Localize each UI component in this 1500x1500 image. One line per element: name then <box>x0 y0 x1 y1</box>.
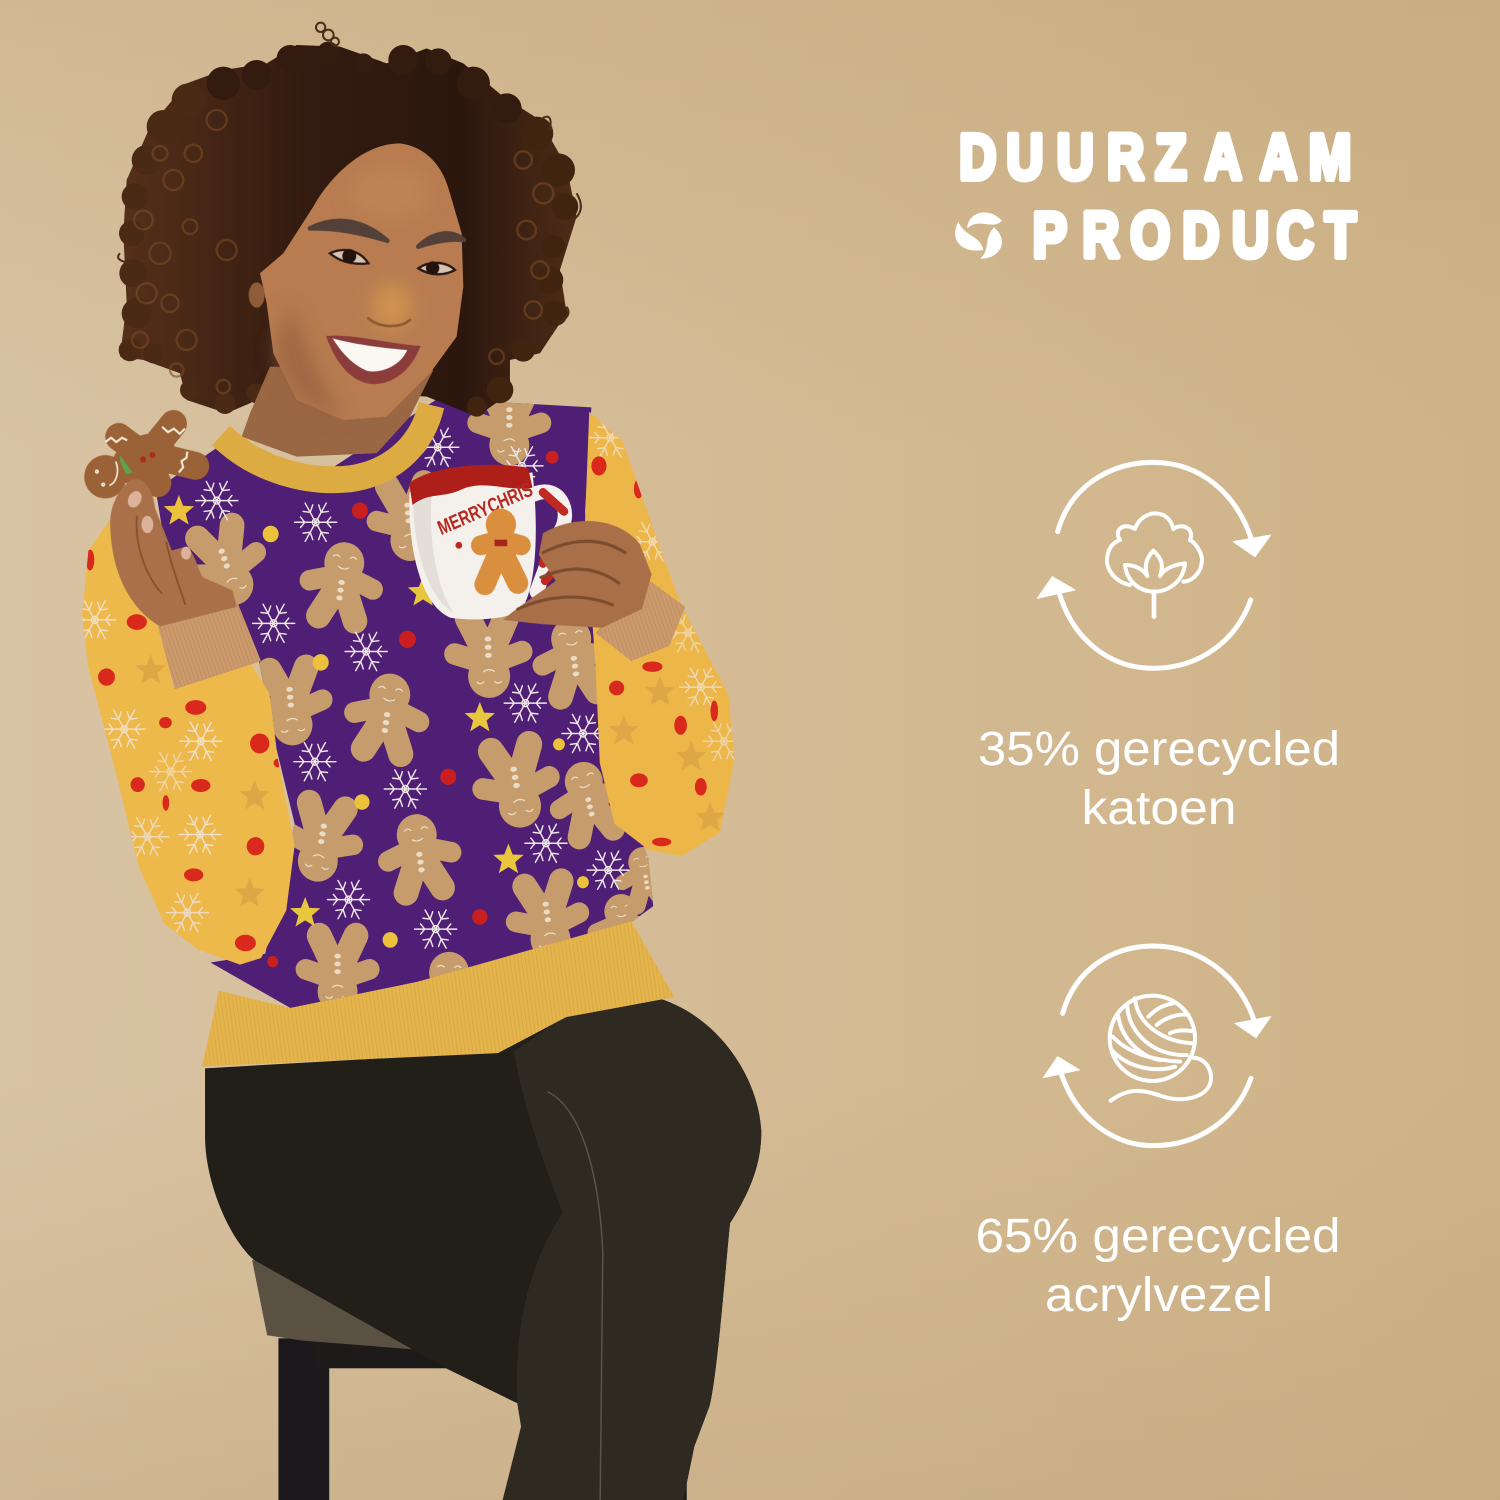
stray curl <box>118 23 581 323</box>
mug <box>409 465 536 619</box>
gingerbread cookie <box>84 423 196 498</box>
candy cane handle <box>535 492 565 592</box>
left hand holding cookie <box>110 479 237 626</box>
dots and stars on torso <box>164 451 589 967</box>
left sleeve <box>82 520 295 965</box>
right sleeve <box>585 412 734 856</box>
hands, mug and cookie <box>84 423 652 628</box>
text: 65% gerecycled acrylvezel: 65% gerecycled <box>976 1210 1340 1263</box>
text: 35% gerecycled katoen <box>978 723 1340 835</box>
heading line 2: PRODUCT <box>1033 201 1356 271</box>
photo: seated woman in Christmas sweater <box>74 23 761 1500</box>
text: 65% gerecycled acrylvezel: acrylvezel <box>1045 1269 1273 1322</box>
icon: yarn ball with recycle arrows <box>1043 946 1271 1146</box>
collar <box>221 405 431 480</box>
title: Duurzaam product <box>955 123 1356 271</box>
smile <box>326 336 421 384</box>
sleeve cuffs <box>158 576 685 689</box>
purple torso <box>156 399 653 1008</box>
gingerbread men pattern <box>185 389 673 1030</box>
text: 35% gerecycled katoen: katoen <box>1082 782 1236 835</box>
nose shadow <box>368 318 410 326</box>
black jeans <box>205 997 761 1500</box>
mug lettering: MERRYCHRIS <box>435 479 536 540</box>
ear <box>249 282 265 308</box>
sweater <box>74 389 745 1067</box>
face <box>249 143 464 420</box>
eyebrows <box>310 221 464 247</box>
yarn ball <box>1110 996 1211 1101</box>
heading line 1: DUURZAAM <box>959 123 1351 193</box>
text: 65% gerecycled acrylvezel <box>976 1210 1340 1322</box>
cotton boll <box>1107 513 1202 617</box>
right hand holding mug <box>503 521 652 628</box>
hair highlights <box>132 110 553 393</box>
neck <box>242 367 433 457</box>
sleeve pattern <box>74 419 745 951</box>
eyes <box>330 249 455 275</box>
icon: three leaves recycle <box>955 212 1002 259</box>
sweater hem <box>202 921 674 1067</box>
cheek and forehead light <box>273 167 430 420</box>
stool <box>252 1260 687 1500</box>
cycle arrows <box>1043 946 1271 1146</box>
cycle arrows <box>1037 462 1271 668</box>
icon: cotton with recycle arrows <box>1037 462 1271 668</box>
mug gingerbread <box>481 511 521 584</box>
curly hair <box>118 23 581 417</box>
snowflakes on torso <box>196 428 629 948</box>
text: 35% gerecycled katoen: 35% gerecycled <box>978 723 1340 776</box>
